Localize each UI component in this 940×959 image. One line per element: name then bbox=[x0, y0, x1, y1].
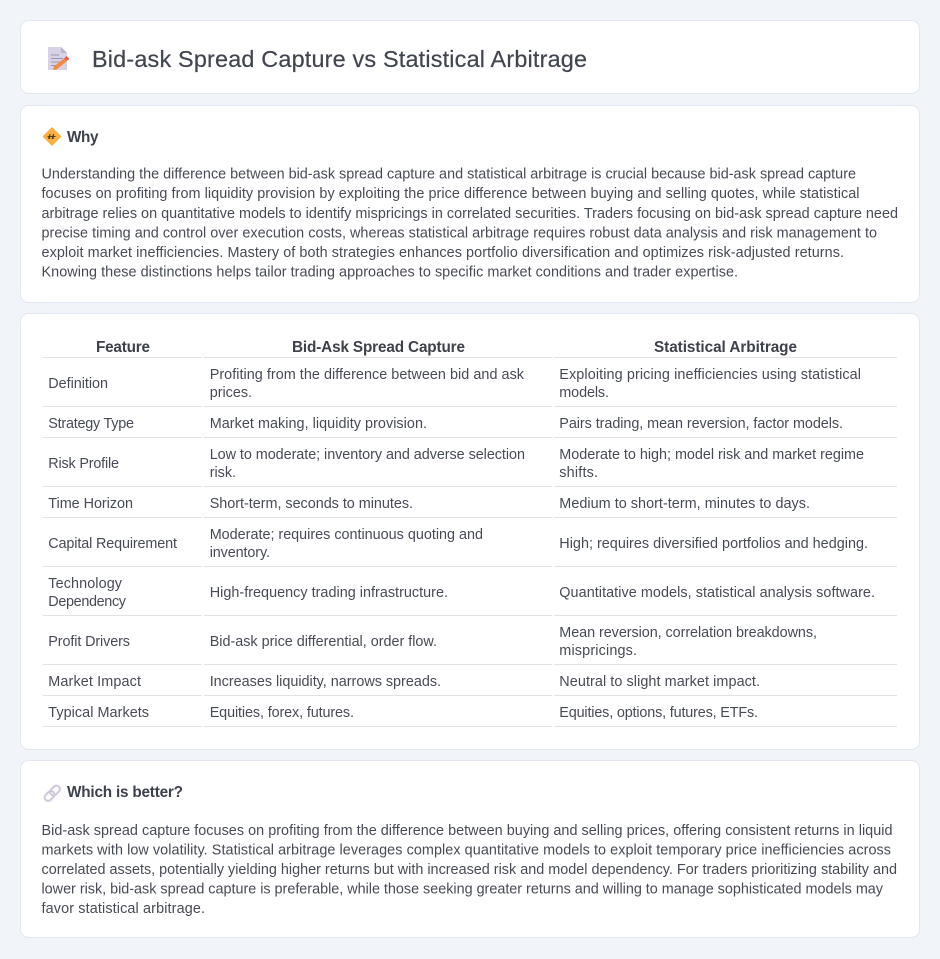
text block: why paragraph: Knowing these distinctions helps tailor trading approaches to specific market conditions and trader expertise. bbox=[42, 265, 738, 281]
row: profit drivers: Bid-ask price differential, order flow. bbox=[210, 634, 437, 650]
row: strategy type bbox=[48, 416, 843, 432]
row: technology dependency: Dependency bbox=[48, 594, 127, 610]
title: Bid-ask Spread Capture vs Statistical Arbitrage bbox=[92, 46, 587, 72]
row: risk profile: risk. bbox=[210, 465, 236, 481]
panel: why bbox=[20, 106, 920, 302]
row: technology dependency: Technology bbox=[48, 576, 123, 592]
table header row bbox=[96, 339, 797, 356]
heading: why: Why bbox=[67, 129, 99, 146]
row: typical markets: Typical Markets bbox=[48, 705, 149, 721]
row: strategy type: Pairs trading, mean reversion, factor models. bbox=[559, 416, 843, 432]
row: market impact: Market Impact bbox=[48, 674, 141, 690]
table header row: Bid-Ask Spread Capture bbox=[292, 339, 465, 356]
row: definition: prices. bbox=[210, 385, 252, 401]
row: profit drivers: mispricings. bbox=[559, 643, 637, 659]
icon: document with pencil bbox=[48, 47, 70, 70]
row: capital requirement: inventory. bbox=[210, 545, 270, 561]
icon: warning diamond bbox=[44, 128, 60, 145]
row: definition: Definition bbox=[48, 376, 108, 392]
text block: why paragraph: focuses on profiting from liquidity provision by exploiting the price difference between buying and selling quotes, while statistical bbox=[42, 186, 860, 202]
row: market impact bbox=[48, 674, 760, 690]
row: technology dependency: High-frequency trading infrastructure. bbox=[210, 585, 448, 601]
row: definition: Profiting from the difference between bid and ask bbox=[210, 367, 525, 383]
text block: why paragraph: Understanding the difference between bid-ask spread capture and statistical arbitrage is crucial because bid-ask spread capture bbox=[42, 167, 856, 183]
text block: which is better paragraph: Bid-ask spread capture focuses on profiting from the difference between buying and selling prices, offering consistent returns in liquid bbox=[42, 823, 892, 839]
row: market impact: Increases liquidity, narrows spreads. bbox=[210, 674, 441, 690]
row: definition: Exploiting pricing inefficiencies using statistical bbox=[559, 367, 861, 383]
panel: header bbox=[20, 20, 920, 94]
row: risk profile: Moderate to high; model risk and market regime bbox=[559, 447, 864, 463]
text block: why paragraph: exploit market inefficiencies. Mastery of both strategies enhances portfolio diversification and optimizes risk-adjusted returns. bbox=[42, 245, 844, 261]
row: capital requirement: Moderate; requires continuous quoting and bbox=[210, 527, 483, 543]
row: time horizon: Medium to short-term, minutes to days. bbox=[559, 496, 810, 512]
row: risk profile: Low to moderate; inventory and adverse selection bbox=[210, 447, 525, 463]
row: capital requirement bbox=[48, 527, 868, 561]
panel: which is better bbox=[20, 760, 920, 938]
row: definition: models. bbox=[559, 385, 609, 401]
row: typical markets bbox=[48, 705, 758, 721]
text block: which is better paragraph bbox=[42, 823, 897, 917]
row: strategy type: Strategy Type bbox=[48, 416, 134, 432]
row: market impact: Neutral to slight market impact. bbox=[559, 674, 760, 690]
table header row: Statistical Arbitrage bbox=[654, 339, 797, 356]
heading: which is better: Which is better? bbox=[67, 784, 183, 801]
row: profit drivers bbox=[48, 625, 817, 659]
row: risk profile bbox=[48, 447, 864, 481]
row: definition bbox=[48, 367, 861, 401]
row: time horizon bbox=[48, 496, 810, 512]
icon: chain link bbox=[43, 784, 61, 802]
row: technology dependency: Quantitative models, statistical analysis software. bbox=[559, 585, 875, 601]
row: time horizon: Time Horizon bbox=[48, 496, 133, 512]
text block: which is better paragraph: markets with low volatility. Statistical arbitrage leverages complex quantitative models to exploit temporary price inefficiencies across bbox=[42, 842, 891, 858]
text block: why paragraph bbox=[42, 167, 898, 281]
panel: comparison table bbox=[20, 314, 920, 750]
row: technology dependency bbox=[48, 576, 875, 610]
row: profit drivers: Mean reversion, correlation breakdowns, bbox=[559, 625, 817, 641]
row: typical markets: Equities, options, futures, ETFs. bbox=[559, 705, 758, 721]
text block: which is better paragraph: lower risk, bid-ask spread capture is preferable, while those seeking greater returns and willing to manage sophisticated models may bbox=[42, 882, 884, 898]
row: capital requirement: Capital Requirement bbox=[48, 536, 177, 552]
table header row: Feature bbox=[96, 339, 150, 356]
row: strategy type: Market making, liquidity provision. bbox=[210, 416, 427, 432]
text block: why paragraph: arbitrage relies on quantitative models to identify mispricings in correlated securities. Traders focusing on bid-ask spread capture need bbox=[42, 206, 898, 222]
row: risk profile: Risk Profile bbox=[48, 456, 119, 472]
row: time horizon: Short-term, seconds to minutes. bbox=[210, 496, 413, 512]
text block: which is better paragraph: favor statistical arbitrage. bbox=[42, 901, 205, 917]
text block: which is better paragraph: correlated assets, potentially yielding higher returns but with increased risk and model dependency. For traders prioritizing stability and bbox=[42, 862, 897, 878]
row: capital requirement: High; requires diversified portfolios and hedging. bbox=[559, 536, 868, 552]
row: risk profile: shifts. bbox=[559, 465, 598, 481]
row: profit drivers: Profit Drivers bbox=[48, 634, 130, 650]
row: typical markets: Equities, forex, futures. bbox=[210, 705, 354, 721]
text block: why paragraph: precise timing and control over execution costs, whereas statistical arbitrage requires robust data analysis and risk management to bbox=[42, 225, 877, 241]
